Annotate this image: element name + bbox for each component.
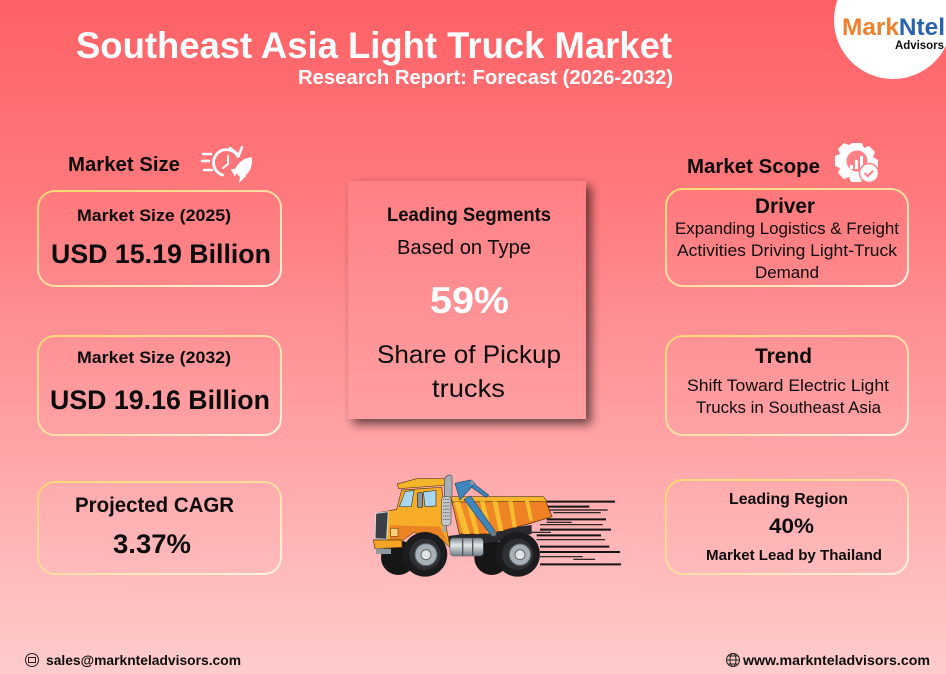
panel: leading region	[666, 480, 908, 574]
heading: Market Size: Market Size	[68, 154, 180, 176]
icon: gear with chart and check	[835, 143, 878, 182]
panel: market size 2032	[38, 336, 281, 435]
panel: leading region: Leading Region	[729, 491, 848, 508]
panel: market size 2032: USD 19.16 Billion	[50, 385, 270, 415]
panel: leading segments	[348, 181, 586, 419]
panel: projected CAGR: 3.37%	[113, 529, 191, 559]
panel: trend: Trend	[755, 345, 812, 368]
panel: market size 2032: Market Size (2032)	[77, 348, 231, 367]
logo: MarkNtel Advisors: MarkNtel	[842, 14, 945, 41]
panel: trend	[666, 336, 908, 435]
icon: clock and rocket	[202, 147, 251, 181]
icon: dump truck with speed lines	[373, 475, 621, 577]
panel: projected CAGR: Projected CAGR	[75, 494, 234, 517]
panel: leading segments: Leading Segments	[387, 205, 551, 226]
panel: projected CAGR	[38, 482, 281, 574]
panel: driver	[666, 189, 908, 286]
panel: market size 2025	[38, 191, 281, 286]
panel: driver: Demand	[755, 263, 819, 282]
panel: trend: Shift Toward Electric Light	[687, 376, 889, 395]
heading: Market Scope: Market Scope	[687, 156, 820, 178]
panel: leading region: 40%	[769, 515, 814, 538]
logo: MarkNtel Advisors	[834, 0, 946, 79]
panel: leading segments: 59%	[430, 280, 509, 321]
title: Southeast Asia Light Truck Market	[76, 25, 672, 66]
logo: MarkNtel Advisors: Advisors	[895, 38, 944, 52]
footer: email: sales@marknteladvisors.com	[46, 652, 241, 668]
panel: leading region: Market Lead by Thailand	[706, 547, 882, 564]
panel: leading segments: Based on Type	[397, 237, 531, 259]
panel: market size 2025: Market Size (2025)	[77, 206, 231, 225]
panel: driver: Activities Driving Light-Truck	[677, 241, 898, 260]
subtitle: Research Report: Forecast (2026-2032)	[298, 67, 673, 89]
panel: trend: Trucks in Southeast Asia	[696, 398, 882, 417]
panel: leading segments: Share of Pickup	[377, 341, 561, 369]
panel: market size 2025: USD 15.19 Billion	[51, 239, 271, 269]
title block	[76, 25, 673, 89]
panel: leading segments: trucks	[432, 375, 505, 403]
footer: website: www.marknteladvisors.com	[742, 652, 930, 668]
panel: driver: Driver	[755, 195, 815, 218]
panel: driver: Expanding Logistics & Freight	[675, 219, 899, 238]
